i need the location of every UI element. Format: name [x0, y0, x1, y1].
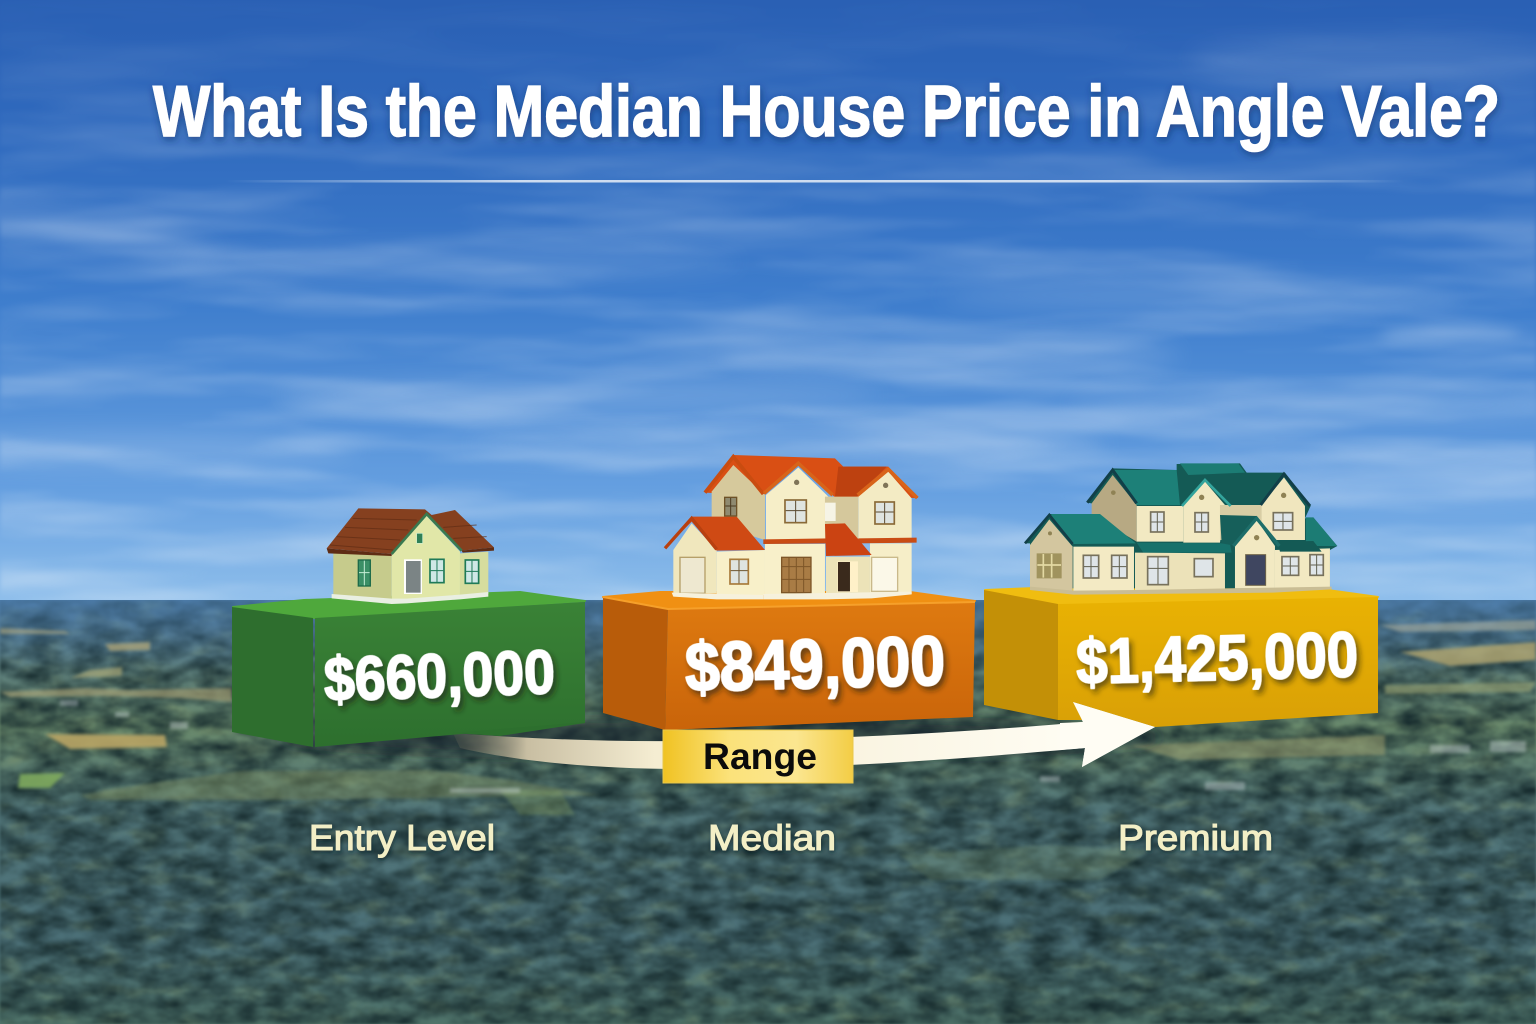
price: premium: $1,425,000	[1075, 618, 1359, 698]
range tag: Range	[703, 736, 817, 777]
price: entry level: $660,000	[323, 638, 556, 715]
panel: entry level block	[232, 592, 585, 747]
title rule	[225, 180, 1405, 182]
range tag	[663, 730, 853, 783]
icon: orange family house	[665, 455, 918, 599]
arrow head overlay	[1060, 702, 1155, 767]
icon: green starter house	[327, 508, 494, 604]
landscape background	[0, 600, 1536, 1024]
label: median: Median	[708, 817, 836, 858]
price: median: $849,000	[684, 622, 946, 706]
label: entry level: Entry Level	[309, 817, 495, 858]
panel: median block	[603, 592, 975, 730]
soft ground shadow	[280, 718, 1160, 758]
label: premium: Premium	[1118, 817, 1273, 858]
icon: teal luxury house	[1025, 463, 1337, 595]
panel: premium block	[984, 587, 1378, 727]
sky background	[0, 0, 1536, 610]
range arrow	[453, 702, 1155, 769]
